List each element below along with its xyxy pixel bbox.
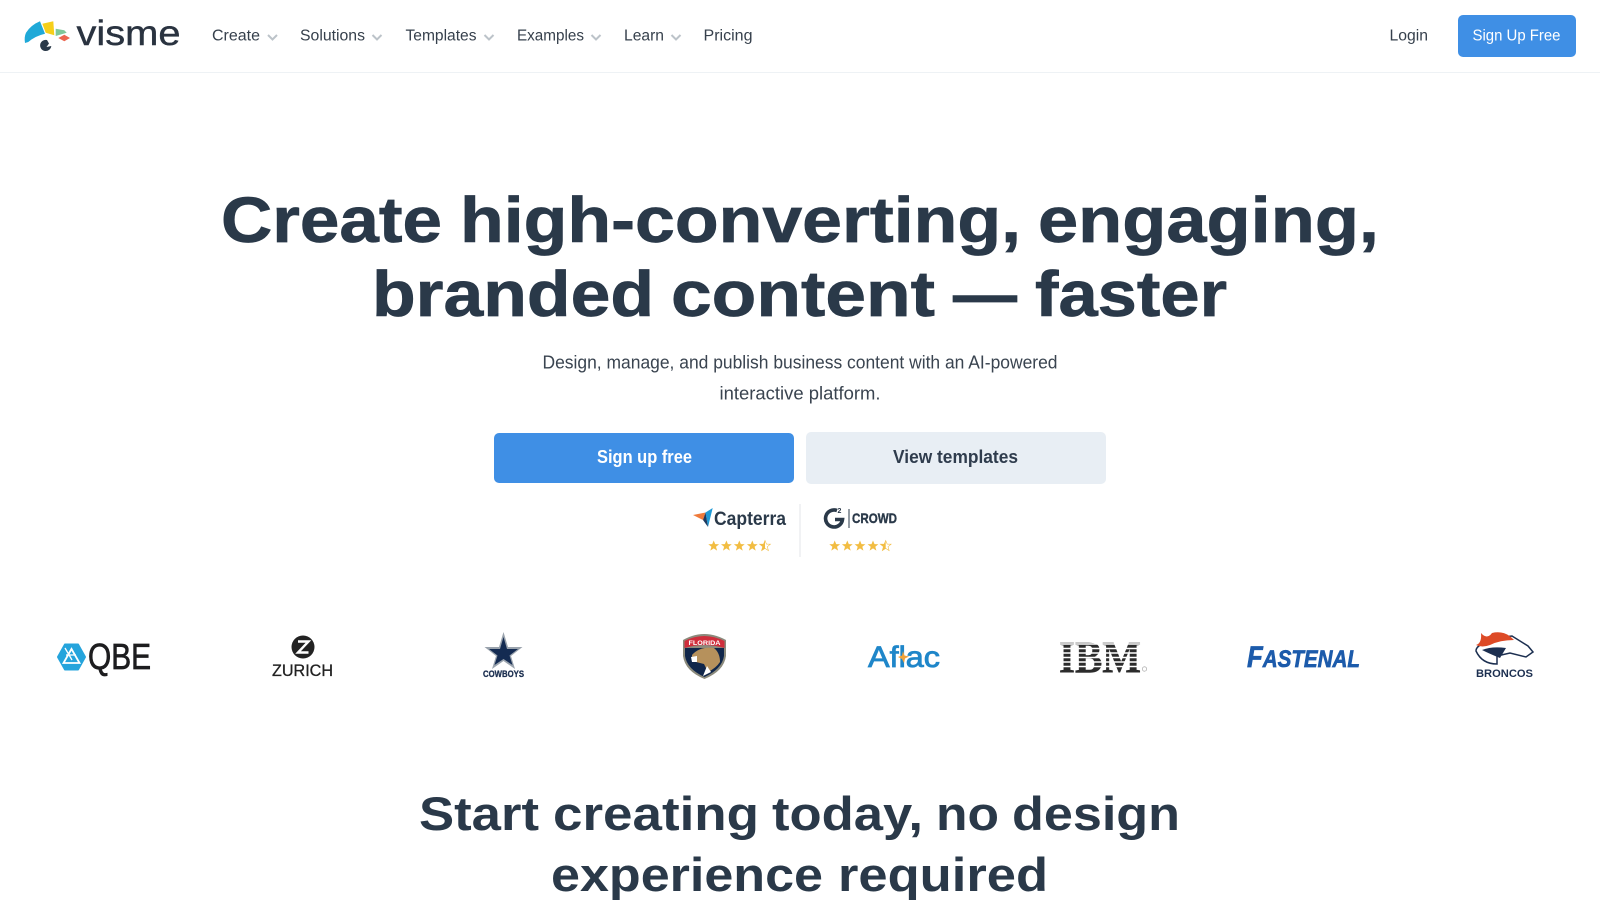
rating: G2 Crowd: CROWD <box>852 510 897 526</box>
client logos row <box>58 632 1533 682</box>
logo: Broncos <box>1476 632 1533 680</box>
button: sign up free: Sign up free <box>597 447 692 467</box>
logo: Broncos: BRONCOS <box>1476 668 1533 680</box>
sign up button: Sign Up Free <box>1472 28 1560 44</box>
menu item: Learn: Learn <box>624 28 664 44</box>
logo: Cowboys: COWBOYS <box>483 669 524 680</box>
logo: Zurich: ZURICH <box>272 662 333 680</box>
login link: Login <box>1390 28 1428 44</box>
rating: Capterra <box>693 508 786 551</box>
section heading <box>419 787 1180 900</box>
section heading: design <box>1012 787 1180 840</box>
visme logo <box>25 14 180 53</box>
hero description: Design, manage, and publish business content with an AI-powered <box>542 352 1058 372</box>
logo: IBM: IBM <box>1059 633 1141 682</box>
hero title: engaging, <box>1038 184 1379 256</box>
visme logo: visme <box>76 14 180 53</box>
navigation header <box>0 0 1600 73</box>
logo: QBE <box>58 636 151 677</box>
rating: G2 Crowd <box>826 508 897 551</box>
logo: Cowboys <box>483 632 524 680</box>
section heading: today, <box>772 787 923 840</box>
hero title: faster <box>1035 258 1227 330</box>
button: sign up free <box>494 433 794 483</box>
menu item: Examples: Examples <box>517 28 584 44</box>
menu item: Solutions: Solutions <box>300 28 365 44</box>
hero title: content <box>671 258 935 330</box>
logo: Zurich <box>272 636 333 680</box>
hero title: branded <box>372 258 654 330</box>
hero title: Create <box>221 184 442 256</box>
button: view templates <box>806 432 1106 484</box>
section heading: required <box>838 848 1048 900</box>
hero description <box>542 352 1058 404</box>
stars <box>829 540 891 551</box>
icon: Capterra arrow <box>693 508 713 527</box>
section heading: creating <box>553 787 759 840</box>
hero title: high-converting, <box>460 184 1021 256</box>
rating: Capterra: Capterra <box>714 509 786 530</box>
logo: Florida Panthers: FLORIDA <box>688 640 721 647</box>
logo: QBE: QBE <box>88 636 151 677</box>
hero title: — <box>953 258 1017 330</box>
stars <box>708 540 770 551</box>
sign up button <box>1458 15 1576 57</box>
menu item: Pricing: Pricing <box>704 28 752 44</box>
logo: Aflac: Aflac <box>868 641 940 674</box>
hero title <box>221 184 1379 330</box>
logo: Florida Panthers <box>683 634 726 679</box>
section heading: experience <box>551 848 823 900</box>
section heading: Start <box>419 787 539 840</box>
menu item: Templates: Templates <box>406 28 477 44</box>
button: view templates: View templates <box>893 447 1018 467</box>
menu item: Create: Create <box>212 28 260 44</box>
icon: G2 mark: 2 <box>838 508 842 515</box>
hero description: interactive platform. <box>720 384 880 404</box>
logo: Fastenal: FASTENAL <box>1247 641 1360 674</box>
section heading: no <box>936 787 999 840</box>
